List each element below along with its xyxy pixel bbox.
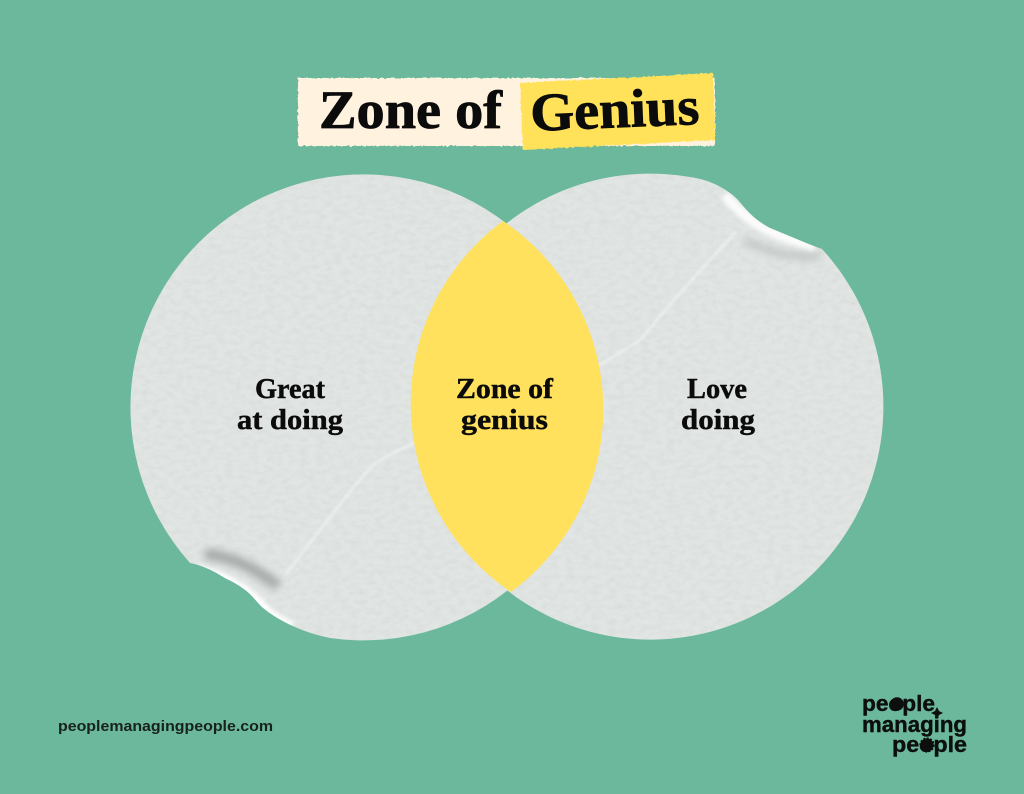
- label: great at doing: [237, 373, 344, 436]
- title strip: yellow: [520, 73, 715, 150]
- logo icon: solid dot: [890, 697, 904, 711]
- logo text: managing: [862, 712, 967, 737]
- label: zone of genius: genius: [461, 404, 548, 436]
- website url: peoplemanagingpeople.com: [58, 719, 273, 735]
- label: love doing: Love: [687, 373, 747, 405]
- label: love doing: doing: [681, 404, 756, 436]
- label: great at doing: Great: [255, 373, 325, 405]
- circle: love doing: [506, 174, 884, 640]
- logo: [862, 691, 967, 757]
- title text: Zone of: Zone of: [319, 80, 503, 140]
- logo text: people: [892, 732, 967, 757]
- logo text: people: [862, 691, 935, 716]
- label: love doing: [681, 373, 756, 436]
- title: [298, 73, 715, 150]
- logo text: [862, 691, 967, 757]
- logo icon: sparkle: [931, 707, 943, 719]
- title text: Genius: Genius: [529, 76, 700, 143]
- circle: great at doing: [130, 174, 508, 640]
- label: zone of genius: [456, 373, 553, 436]
- label: zone of genius: Zone of: [456, 373, 553, 405]
- logo icon: starburst: [920, 738, 934, 752]
- label: great at doing: at doing: [237, 404, 344, 436]
- lens: zone of genius overlap: [411, 221, 603, 592]
- title strip: cream: [298, 78, 715, 146]
- venn diagram: [130, 174, 883, 640]
